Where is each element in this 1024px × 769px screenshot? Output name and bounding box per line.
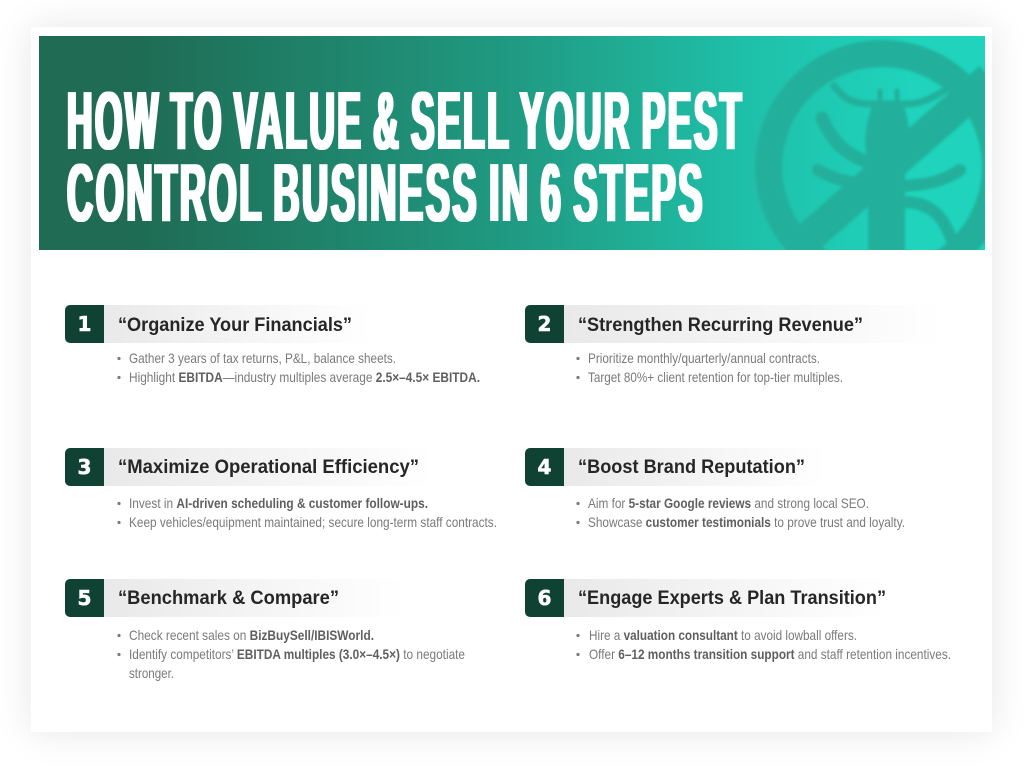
text block 4: Showcase customer testimonials to prove trust and loyalty. (588, 514, 905, 530)
text block 5: Identify competitors’ EBITDA multiples (3.0×–4.5×) to negotiate (129, 646, 465, 662)
text block 2 (576, 350, 843, 385)
number badge 3 (65, 448, 104, 486)
text block 3: Invest in AI-driven scheduling & customer follow-ups. (129, 495, 428, 511)
heading 4: “Boost Brand Reputation” (578, 457, 805, 478)
heading 1: “Organize Your Financials” (118, 315, 352, 336)
step 5 (65, 579, 465, 681)
header banner (39, 36, 985, 250)
text block 4: Aim for 5-star Google reviews and strong local SEO. (588, 495, 869, 511)
number badge 1 (65, 305, 104, 343)
number badge 6 (525, 579, 564, 617)
heading 6: “Engage Experts & Plan Transition” (578, 588, 886, 609)
step 3 (65, 448, 497, 530)
step 1 (65, 305, 480, 385)
text block 4 (576, 495, 905, 530)
number badge 3: 3 (78, 455, 91, 479)
heading bar 6 (564, 579, 886, 617)
text block 3 (117, 495, 497, 530)
step 6 (525, 579, 951, 662)
heading 3: “Maximize Operational Efficiency” (118, 457, 419, 478)
heading 2: “Strengthen Recurring Revenue” (578, 315, 863, 336)
title (67, 74, 744, 239)
text block 1: Highlight EBITDA—industry multiples average 2.5×–4.5× EBITDA. (129, 369, 480, 385)
text block 6 (576, 627, 951, 662)
number badge 5: 5 (78, 586, 91, 610)
heading 5: “Benchmark & Compare” (118, 588, 339, 609)
text block 5: Check recent sales on BizBuySell/IBISWorld. (129, 627, 374, 643)
text block 3: Keep vehicles/equipment maintained; secure long-term staff contracts. (129, 514, 497, 530)
text block 5 (117, 627, 465, 681)
heading bar 3 (104, 448, 434, 486)
heading bar 5 (104, 579, 404, 617)
text block 2: Prioritize monthly/quarterly/annual contracts. (588, 350, 820, 366)
heading bar 1 (104, 305, 370, 343)
text block 2: Target 80%+ client retention for top-tier multiples. (588, 369, 843, 385)
number badge 2 (525, 305, 564, 343)
number badge 4 (525, 448, 564, 486)
number badge 4: 4 (538, 455, 551, 479)
text block 5: stronger. (129, 665, 174, 681)
heading bar 4 (564, 448, 826, 486)
number badge 6: 6 (538, 586, 551, 610)
number badge 5 (65, 579, 104, 617)
step 2 (525, 305, 944, 385)
text block 1: Gather 3 years of tax returns, P&L, balance sheets. (129, 350, 396, 366)
number badge 1: 1 (78, 312, 91, 336)
text block 6: Offer 6–12 months transition support and staff retention incentives. (589, 646, 951, 662)
number badge 2: 2 (538, 312, 551, 336)
heading bar 2 (564, 305, 944, 343)
step 4 (525, 448, 905, 530)
icon: crossed-out bug watermark (768, 54, 996, 280)
text block 6: Hire a valuation consultant to avoid lowball offers. (589, 627, 857, 643)
text block 1 (117, 350, 480, 385)
